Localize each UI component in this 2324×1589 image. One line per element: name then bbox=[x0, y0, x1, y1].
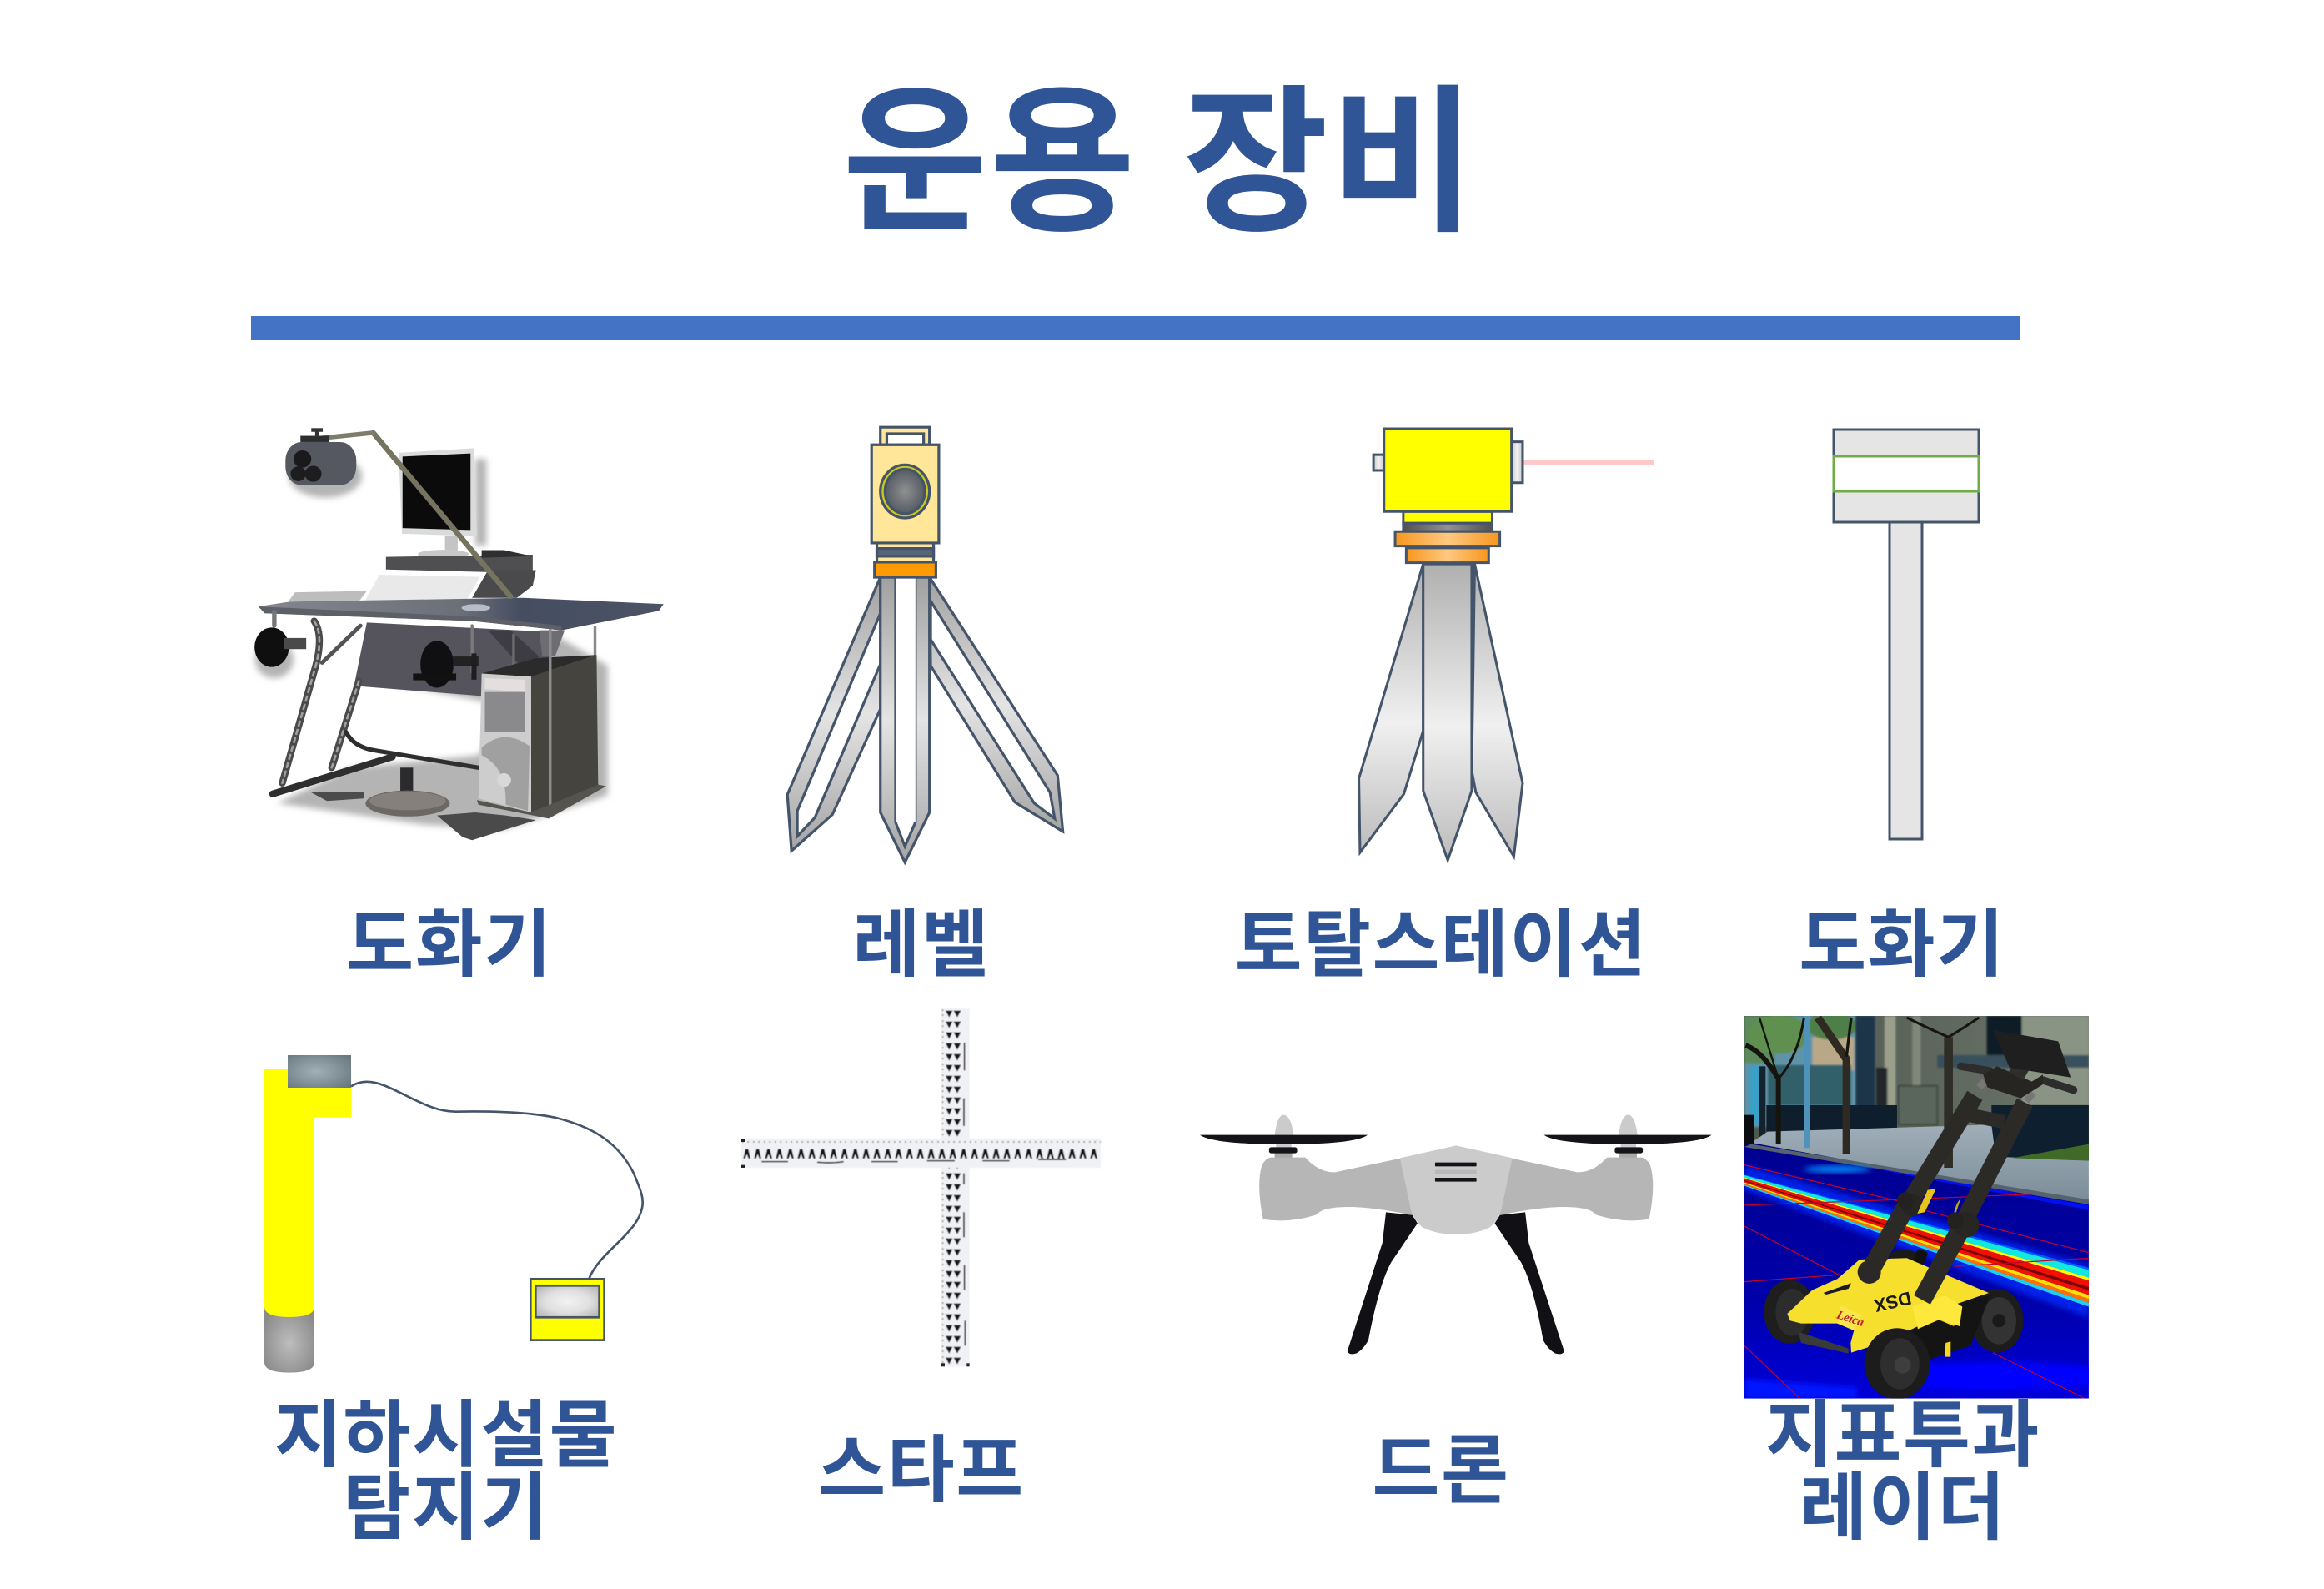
label: underground utility detector: 지하시설물 bbox=[274, 1394, 618, 1476]
icon: GPR cart over radar scan bbox=[1744, 1012, 2121, 1400]
label: level: 레벨 bbox=[853, 903, 990, 986]
icon: signboard staff bbox=[1834, 430, 1979, 839]
panel: ground penetrating radar bbox=[1744, 1016, 2089, 1540]
panel: level bbox=[787, 427, 1063, 986]
panel: underground utility detector bbox=[264, 1055, 643, 1549]
infographic: operating equipment bbox=[251, 85, 2089, 1540]
panel: drone bbox=[1200, 1115, 1712, 1511]
panel: staff bbox=[741, 1008, 1101, 1511]
label: ground penetrating radar: 지표투과 bbox=[1765, 1394, 2040, 1476]
icon: level on tripod bbox=[787, 427, 1063, 862]
label: total station: 토탈스테이션 bbox=[1235, 903, 1647, 986]
title underline bar bbox=[251, 316, 2020, 340]
label: staff: 스타프 bbox=[818, 1429, 1025, 1511]
panel: plotting instrument bbox=[254, 428, 664, 986]
icon: levelling staffs bbox=[741, 1008, 1101, 1366]
icon: GPR cart over radar scan: Leica bbox=[1834, 1308, 1865, 1330]
label: plotter: 도화기 bbox=[1799, 903, 2005, 986]
cart arms bbox=[1868, 1066, 2074, 1300]
label line 2: 레이더 bbox=[1799, 1466, 2006, 1549]
panel: total station bbox=[1235, 429, 1654, 986]
panel: plotter staff bbox=[1799, 430, 2005, 986]
label: drone: 드론 bbox=[1373, 1429, 1509, 1511]
icon: plotter desk bbox=[254, 428, 664, 840]
label line 2: 탐지기 bbox=[343, 1466, 550, 1549]
label: plotter: 도화기 bbox=[346, 903, 553, 986]
icon: quadcopter bbox=[1200, 1115, 1712, 1354]
icon: GPR cart over radar scan: DSX bbox=[1871, 1287, 1913, 1316]
icon: total station on tripod bbox=[1359, 429, 1654, 860]
title: 운용 장비 bbox=[842, 75, 1478, 252]
icon: detector with cable and readout bbox=[264, 1055, 643, 1373]
